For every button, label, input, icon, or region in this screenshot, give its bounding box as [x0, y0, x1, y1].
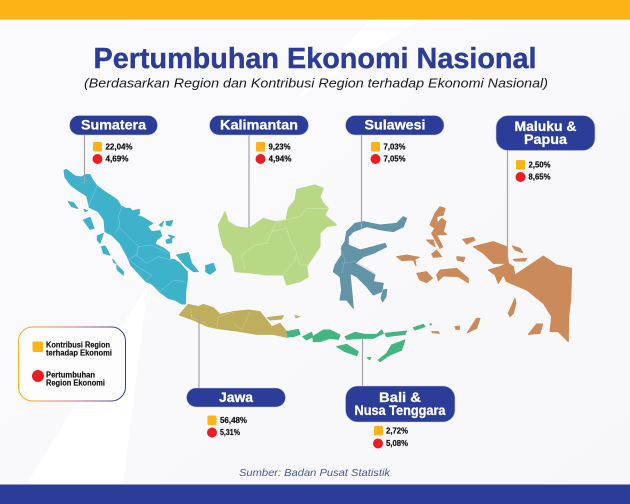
label: Sumatera: Sumatera: [81, 118, 147, 132]
stats: Maluku and Papua: 2,50%: [528, 160, 550, 170]
label: Sulawesi: [346, 116, 444, 135]
label: Jawa: Jawa: [219, 390, 253, 405]
stats: Kalimantan: [256, 142, 292, 164]
stats: Sulawesi: 7,05%: [384, 154, 406, 164]
stats: Jawa: [207, 416, 247, 438]
legend: terhadap Ekonomi: [46, 348, 112, 358]
label: Bali and Nusa Tenggara: [346, 386, 455, 422]
label: Maluku and Papua: Maluku &: [514, 119, 577, 134]
map: Sulawesi: [333, 217, 407, 308]
stats: Sulawesi: 7,03%: [384, 142, 406, 152]
map: Jawa: [179, 304, 299, 338]
stats: Bali and Nusa Tenggara: [373, 426, 408, 448]
label: Jawa: [186, 388, 286, 407]
stats: Bali and Nusa Tenggara: 2,72%: [386, 426, 408, 436]
stats: Kalimantan: 4,94%: [268, 154, 292, 164]
stats: Kalimantan: 9,23%: [268, 142, 290, 152]
label: Kalimantan: [210, 116, 308, 135]
map: Maluku and Papua: [397, 207, 572, 342]
legend: Kontribusi Region: [46, 340, 110, 350]
label: Sulawesi: Sulawesi: [364, 118, 426, 132]
label: Kalimantan: Kalimantan: [220, 118, 298, 132]
map: Bali and Nusa Tenggara: [287, 324, 431, 362]
legend: [18, 327, 126, 401]
leader lines: [84, 135, 508, 388]
map: Sumatera: [64, 169, 216, 304]
label: Bali and Nusa Tenggara: Nusa Tenggara: [354, 403, 446, 418]
label: Maluku and Papua: [496, 116, 595, 150]
stats: Sumatera: 4,69%: [106, 154, 128, 164]
bottom bar: [0, 484, 630, 504]
stats: Maluku and Papua: [516, 160, 550, 182]
stats: Jawa: 5,31%: [220, 428, 240, 437]
title: Pertumbuhan Ekonomi Nasional: [94, 43, 536, 75]
stats: Sumatera: [92, 142, 132, 164]
subtitle: (Berdasarkan Region dan Kontribusi Region terhadap Ekonomi Nasional): [84, 76, 548, 90]
top bar: [0, 0, 630, 20]
stats: Bali and Nusa Tenggara: 5,08%: [386, 439, 408, 448]
stats: Sumatera: 22,04%: [106, 142, 132, 152]
legend: Pertumbuhan: [46, 370, 95, 380]
stats: Sulawesi: [370, 142, 406, 164]
label: Maluku and Papua: Papua: [524, 132, 568, 147]
stats: Maluku and Papua: 8,65%: [528, 172, 550, 182]
legend: Region Ekonomi: [46, 378, 105, 388]
label: Bali and Nusa Tenggara: Bali &: [379, 390, 421, 405]
label: Sumatera: [70, 116, 158, 135]
stats: Jawa: 56,48%: [220, 416, 247, 425]
map: Kalimantan: [218, 185, 337, 285]
source: Sumber: Badan Pusat Statistik: [239, 467, 391, 479]
